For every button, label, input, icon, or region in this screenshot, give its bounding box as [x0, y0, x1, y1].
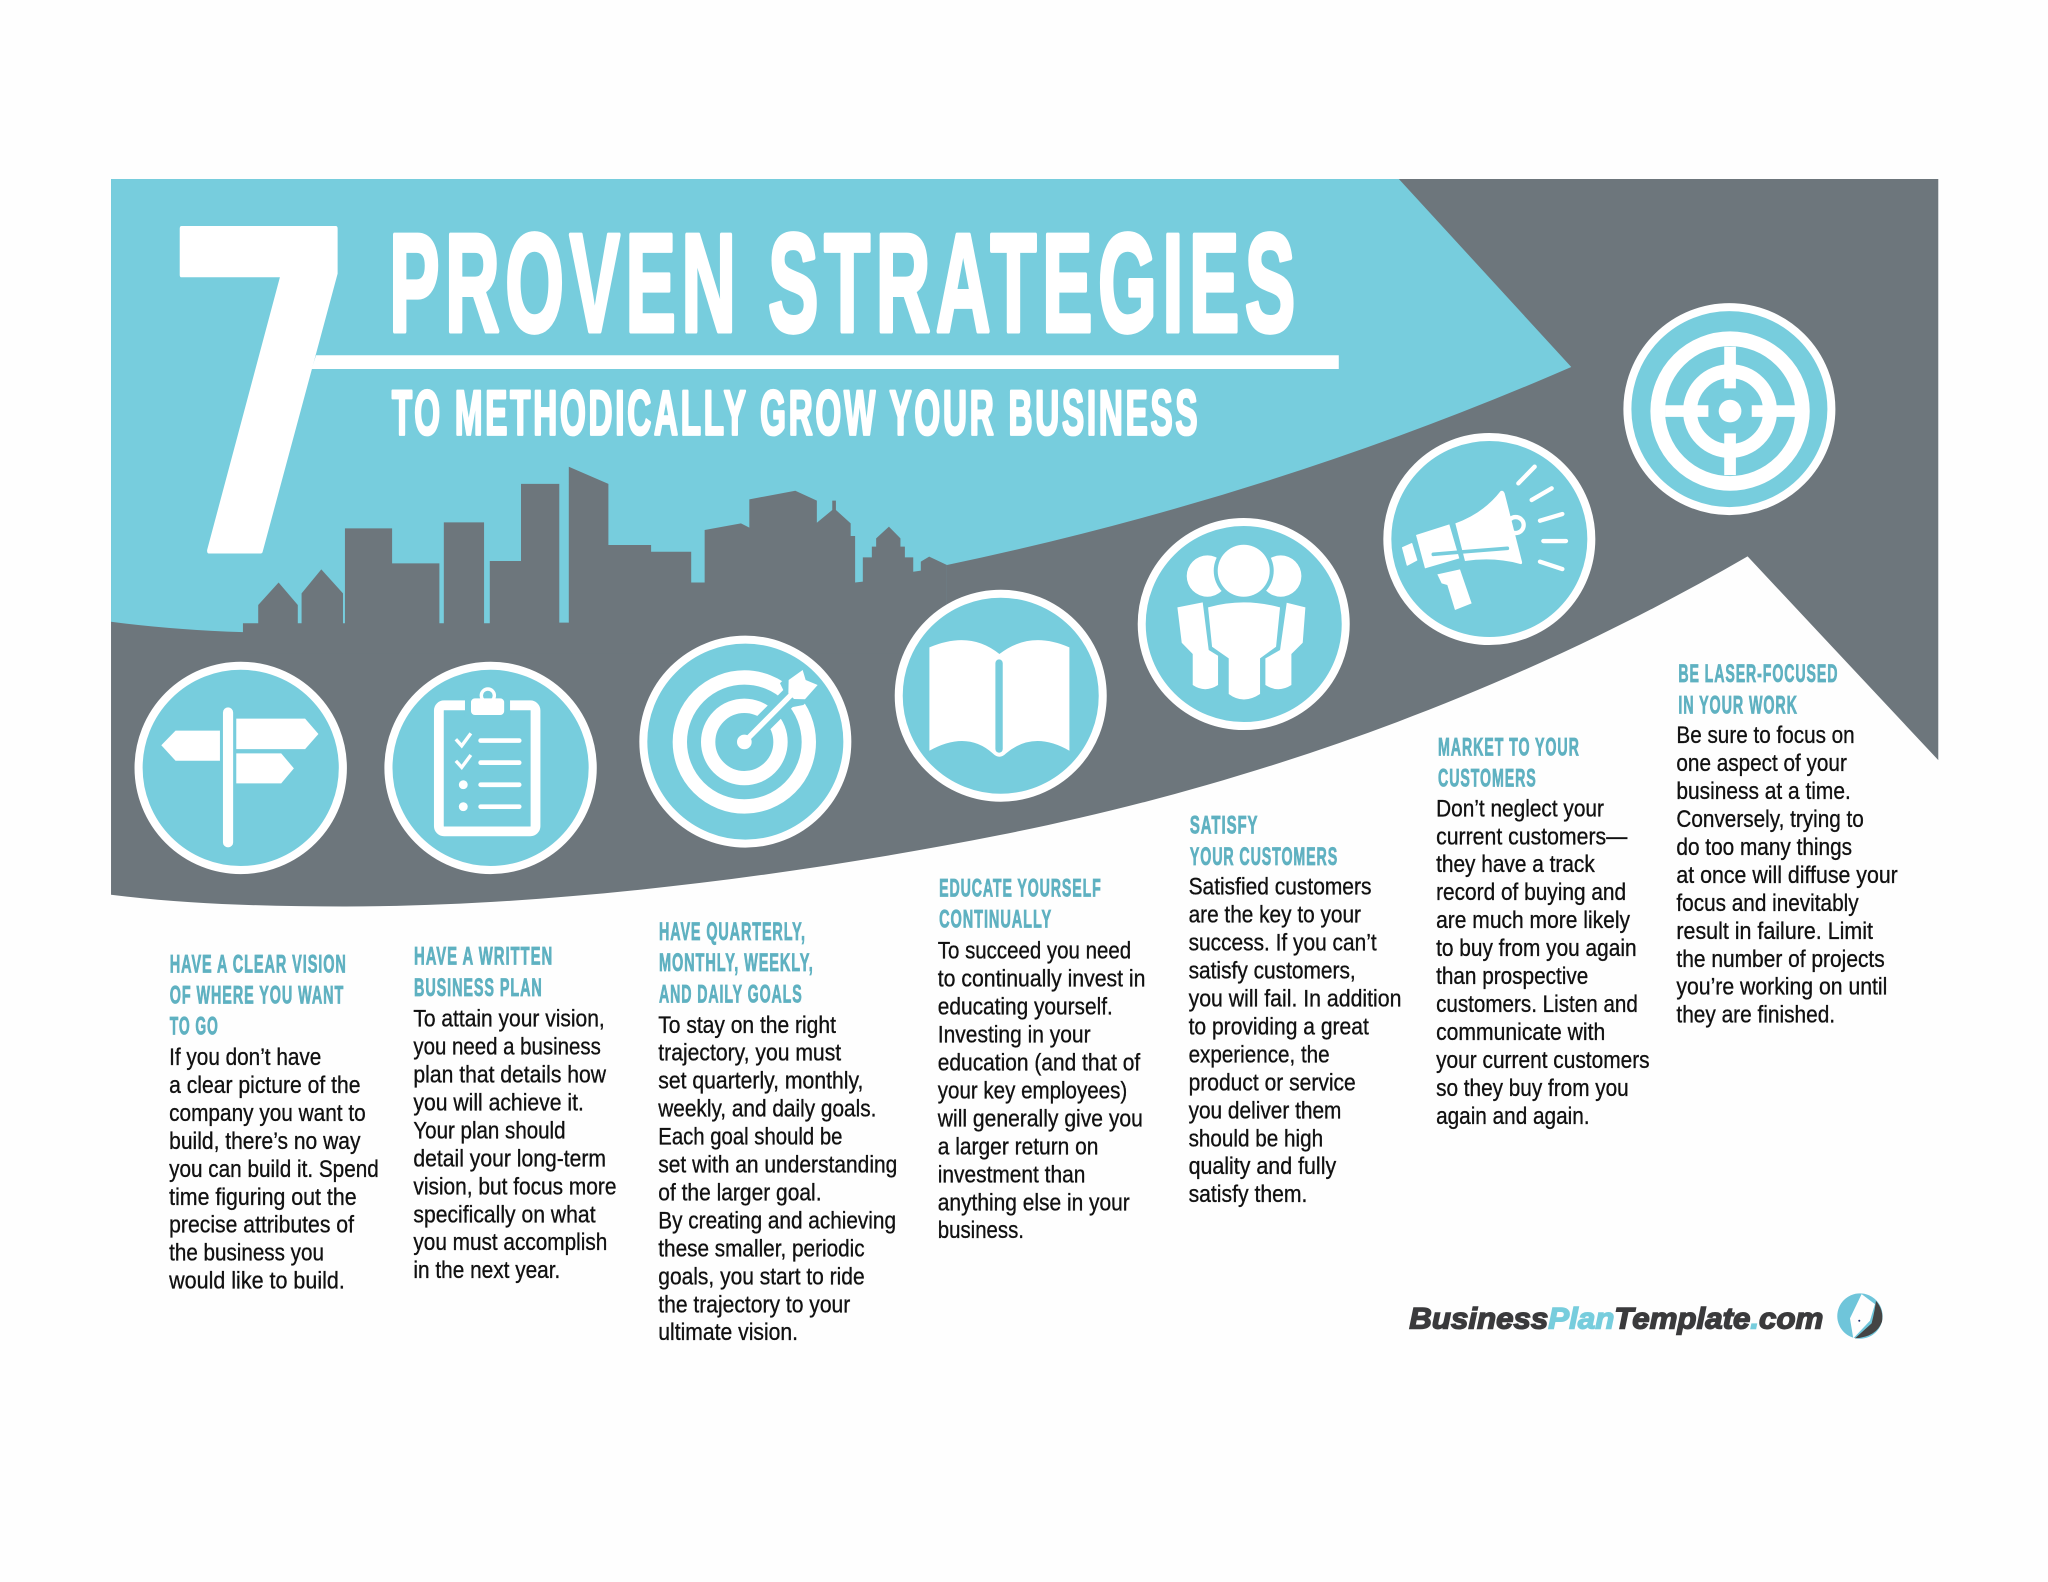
step 4 text: educate yourself	[937, 875, 1145, 1244]
step 2 body: you will achieve it.	[413, 1089, 584, 1116]
step 3 body: set quarterly, monthly,	[658, 1068, 863, 1095]
step 6 body	[1436, 795, 1650, 1130]
step 3 body: set with an understanding	[658, 1152, 897, 1179]
title: PROVEN STRATEGIES	[389, 204, 1301, 361]
step 6 heading: CUSTOMERS	[1438, 765, 1537, 792]
step 5 text: satisfy customers	[1189, 813, 1401, 1208]
header banner: blue area	[111, 179, 1571, 632]
step 3 body: goals, you start to ride	[658, 1263, 865, 1290]
step 3 body: trajectory, you must	[658, 1040, 841, 1067]
step 1 body: precise attributes of	[169, 1212, 354, 1239]
step 7 text: laser-focused	[1676, 661, 1898, 1029]
step 2 body: To attain your vision,	[413, 1006, 605, 1033]
step 4 body: education (and that of	[938, 1050, 1140, 1077]
step 3 body: the trajectory to your	[658, 1291, 850, 1318]
step 2 text: written plan	[413, 944, 616, 1284]
step 1 heading	[170, 951, 347, 1041]
step 5 body: satisfy customers,	[1189, 958, 1356, 985]
step 5 body: satisfy them.	[1189, 1181, 1307, 1208]
step 7 body: the number of projects	[1676, 946, 1885, 973]
step 4 body: to continually invest in	[938, 966, 1145, 993]
step 5 body: are the key to your	[1189, 902, 1361, 929]
step 7 body: result in failure. Limit	[1676, 918, 1873, 945]
step 5 body: you deliver them	[1189, 1097, 1341, 1124]
step 4 body: Investing in your	[938, 1022, 1091, 1049]
step 1 body: the business you	[169, 1240, 324, 1267]
step 2 body: Your plan should	[413, 1117, 566, 1144]
step 7 body: at once will diffuse your	[1676, 862, 1898, 889]
step 1 body	[168, 1044, 379, 1295]
title rule	[312, 355, 1339, 369]
step 6 body: are much more likely	[1436, 907, 1631, 934]
step 4 body: business.	[938, 1217, 1024, 1244]
step 4 body: anything else in your	[938, 1189, 1130, 1216]
step 7 body: business at a time.	[1676, 778, 1851, 805]
step 4 body: To succeed you need	[938, 938, 1131, 965]
step 3 heading	[659, 919, 814, 1008]
step 5 body: to providing a great	[1189, 1013, 1369, 1040]
step 7 body	[1676, 722, 1898, 1029]
step 2 body: in the next year.	[413, 1257, 560, 1284]
icon: clipboard checklist	[388, 666, 593, 870]
step 2 body: vision, but focus more	[413, 1173, 616, 1200]
step 6 body: customers. Listen and	[1436, 991, 1638, 1018]
step 2 body: specifically on what	[413, 1201, 596, 1228]
step 2 body: detail your long-term	[413, 1145, 606, 1172]
step 1 heading: TO GO	[170, 1014, 219, 1041]
step 3 body: To stay on the right	[658, 1012, 836, 1039]
step 1 body: build, there’s no way	[169, 1128, 361, 1155]
step 2 heading: HAVE A WRITTEN	[414, 944, 553, 971]
step 4 body	[937, 938, 1145, 1244]
step 4 body: educating yourself.	[938, 994, 1113, 1021]
logo icon: pen nib	[1837, 1293, 1883, 1339]
step 2 heading	[414, 944, 553, 1002]
step 5 body: should be high	[1189, 1125, 1323, 1152]
step 5 heading: SATISFY	[1190, 813, 1258, 840]
step 3 body: weekly, and daily goals.	[657, 1096, 876, 1123]
step 1 body: a clear picture of the	[169, 1072, 360, 1099]
step 2 body: plan that details how	[413, 1062, 607, 1089]
step 4 heading: EDUCATE YOURSELF	[939, 875, 1102, 902]
step 6 body: so they buy from you	[1436, 1075, 1629, 1102]
step 3 body: By creating and achieving	[658, 1207, 896, 1234]
icon: crosshair reticle	[1627, 307, 1831, 511]
step 5 body: product or service	[1189, 1069, 1356, 1096]
step 4 body: will generally give you	[937, 1105, 1143, 1132]
step 2 body	[413, 1006, 616, 1284]
step 6 heading	[1438, 734, 1580, 792]
step 1 body: time figuring out the	[169, 1184, 357, 1211]
step 6 body: current customers—	[1436, 823, 1628, 850]
step 6 body: to buy from you again	[1436, 935, 1637, 962]
step 7 body: one aspect of your	[1676, 750, 1847, 777]
step 6 body: communicate with	[1436, 1019, 1605, 1046]
step 3 body: of the larger goal.	[658, 1179, 822, 1206]
step 6 body: again and again.	[1436, 1103, 1590, 1130]
step 6 body: your current customers	[1436, 1047, 1650, 1074]
step 5 body: Satisfied customers	[1189, 874, 1371, 901]
step 5 body	[1189, 874, 1401, 1208]
step 4 body: investment than	[938, 1161, 1085, 1188]
step 7 heading: BE LASER-FOCUSED	[1678, 661, 1838, 688]
step 3 body: ultimate vision.	[658, 1319, 798, 1346]
step 5 body: success. If you can’t	[1189, 930, 1377, 957]
step 3 body	[657, 1012, 897, 1346]
step 7 body: focus and inevitably	[1676, 890, 1859, 917]
step 4 body: a larger return on	[938, 1133, 1098, 1160]
step 3 body: Each goal should be	[658, 1124, 842, 1151]
step 5 heading: YOUR CUSTOMERS	[1190, 844, 1338, 871]
big numeral 7	[180, 226, 338, 554]
icon: open book	[899, 594, 1103, 798]
step 4 body: your key employees)	[938, 1077, 1127, 1104]
step 6 body: Don’t neglect your	[1436, 795, 1604, 822]
logo wordmark: BusinessPlanTemplate.com	[1409, 1302, 1823, 1335]
step 4 heading: CONTINUALLY	[939, 906, 1052, 933]
step 3 text: periodic goals	[657, 919, 897, 1346]
step 4 heading	[939, 875, 1102, 933]
step 3 heading: AND DAILY GOALS	[659, 981, 803, 1008]
step 6 text: market to customers	[1436, 734, 1650, 1130]
step 5 body: experience, the	[1189, 1041, 1330, 1068]
step 3 heading: HAVE QUARTERLY,	[659, 919, 806, 946]
step 1 heading: HAVE A CLEAR VISION	[170, 951, 347, 978]
step 6 body: they have a track	[1436, 851, 1596, 878]
step 5 heading	[1190, 813, 1338, 871]
step 5 body: you will fail. In addition	[1189, 986, 1401, 1013]
step 7 body: you’re working on until	[1676, 974, 1887, 1001]
step 1 text: clear vision	[168, 951, 379, 1295]
step 7 heading	[1678, 661, 1838, 719]
step 3 heading: MONTHLY, WEEKLY,	[659, 950, 814, 977]
step 2 heading: BUSINESS PLAN	[414, 975, 543, 1002]
icon: group of people	[1142, 522, 1346, 726]
step 7 body: do too many things	[1676, 834, 1852, 861]
city skyline silhouette	[243, 467, 947, 653]
step 2 body: you must accomplish	[413, 1229, 607, 1256]
header banner: grey swoosh panel	[111, 179, 1938, 906]
step 7 body: Conversely, trying to	[1676, 806, 1864, 833]
step 3 body: these smaller, periodic	[658, 1235, 865, 1262]
step 1 heading: OF WHERE YOU WANT	[170, 983, 344, 1010]
step 1 body: If you don’t have	[169, 1044, 321, 1071]
step 5 body: quality and fully	[1189, 1153, 1337, 1180]
step 6 body: than prospective	[1436, 963, 1588, 990]
step 1 body: you can build it. Spend	[169, 1156, 379, 1183]
icon: megaphone	[1387, 437, 1591, 641]
step 7 body: they are finished.	[1676, 1002, 1835, 1029]
step 1 body: would like to build.	[168, 1268, 345, 1295]
step 2 body: you need a business	[413, 1034, 601, 1061]
step 1 body: company you want to	[169, 1100, 366, 1127]
step 6 body: record of buying and	[1436, 879, 1626, 906]
icon: target with arrow	[643, 640, 847, 844]
subtitle: TO METHODICALLY GROW YOUR BUSINESS	[392, 378, 1200, 448]
step 6 heading: MARKET TO YOUR	[1438, 734, 1580, 761]
step 7 body: Be sure to focus on	[1676, 722, 1855, 749]
step 7 heading: IN YOUR WORK	[1678, 692, 1798, 719]
icon: signpost	[139, 666, 343, 870]
